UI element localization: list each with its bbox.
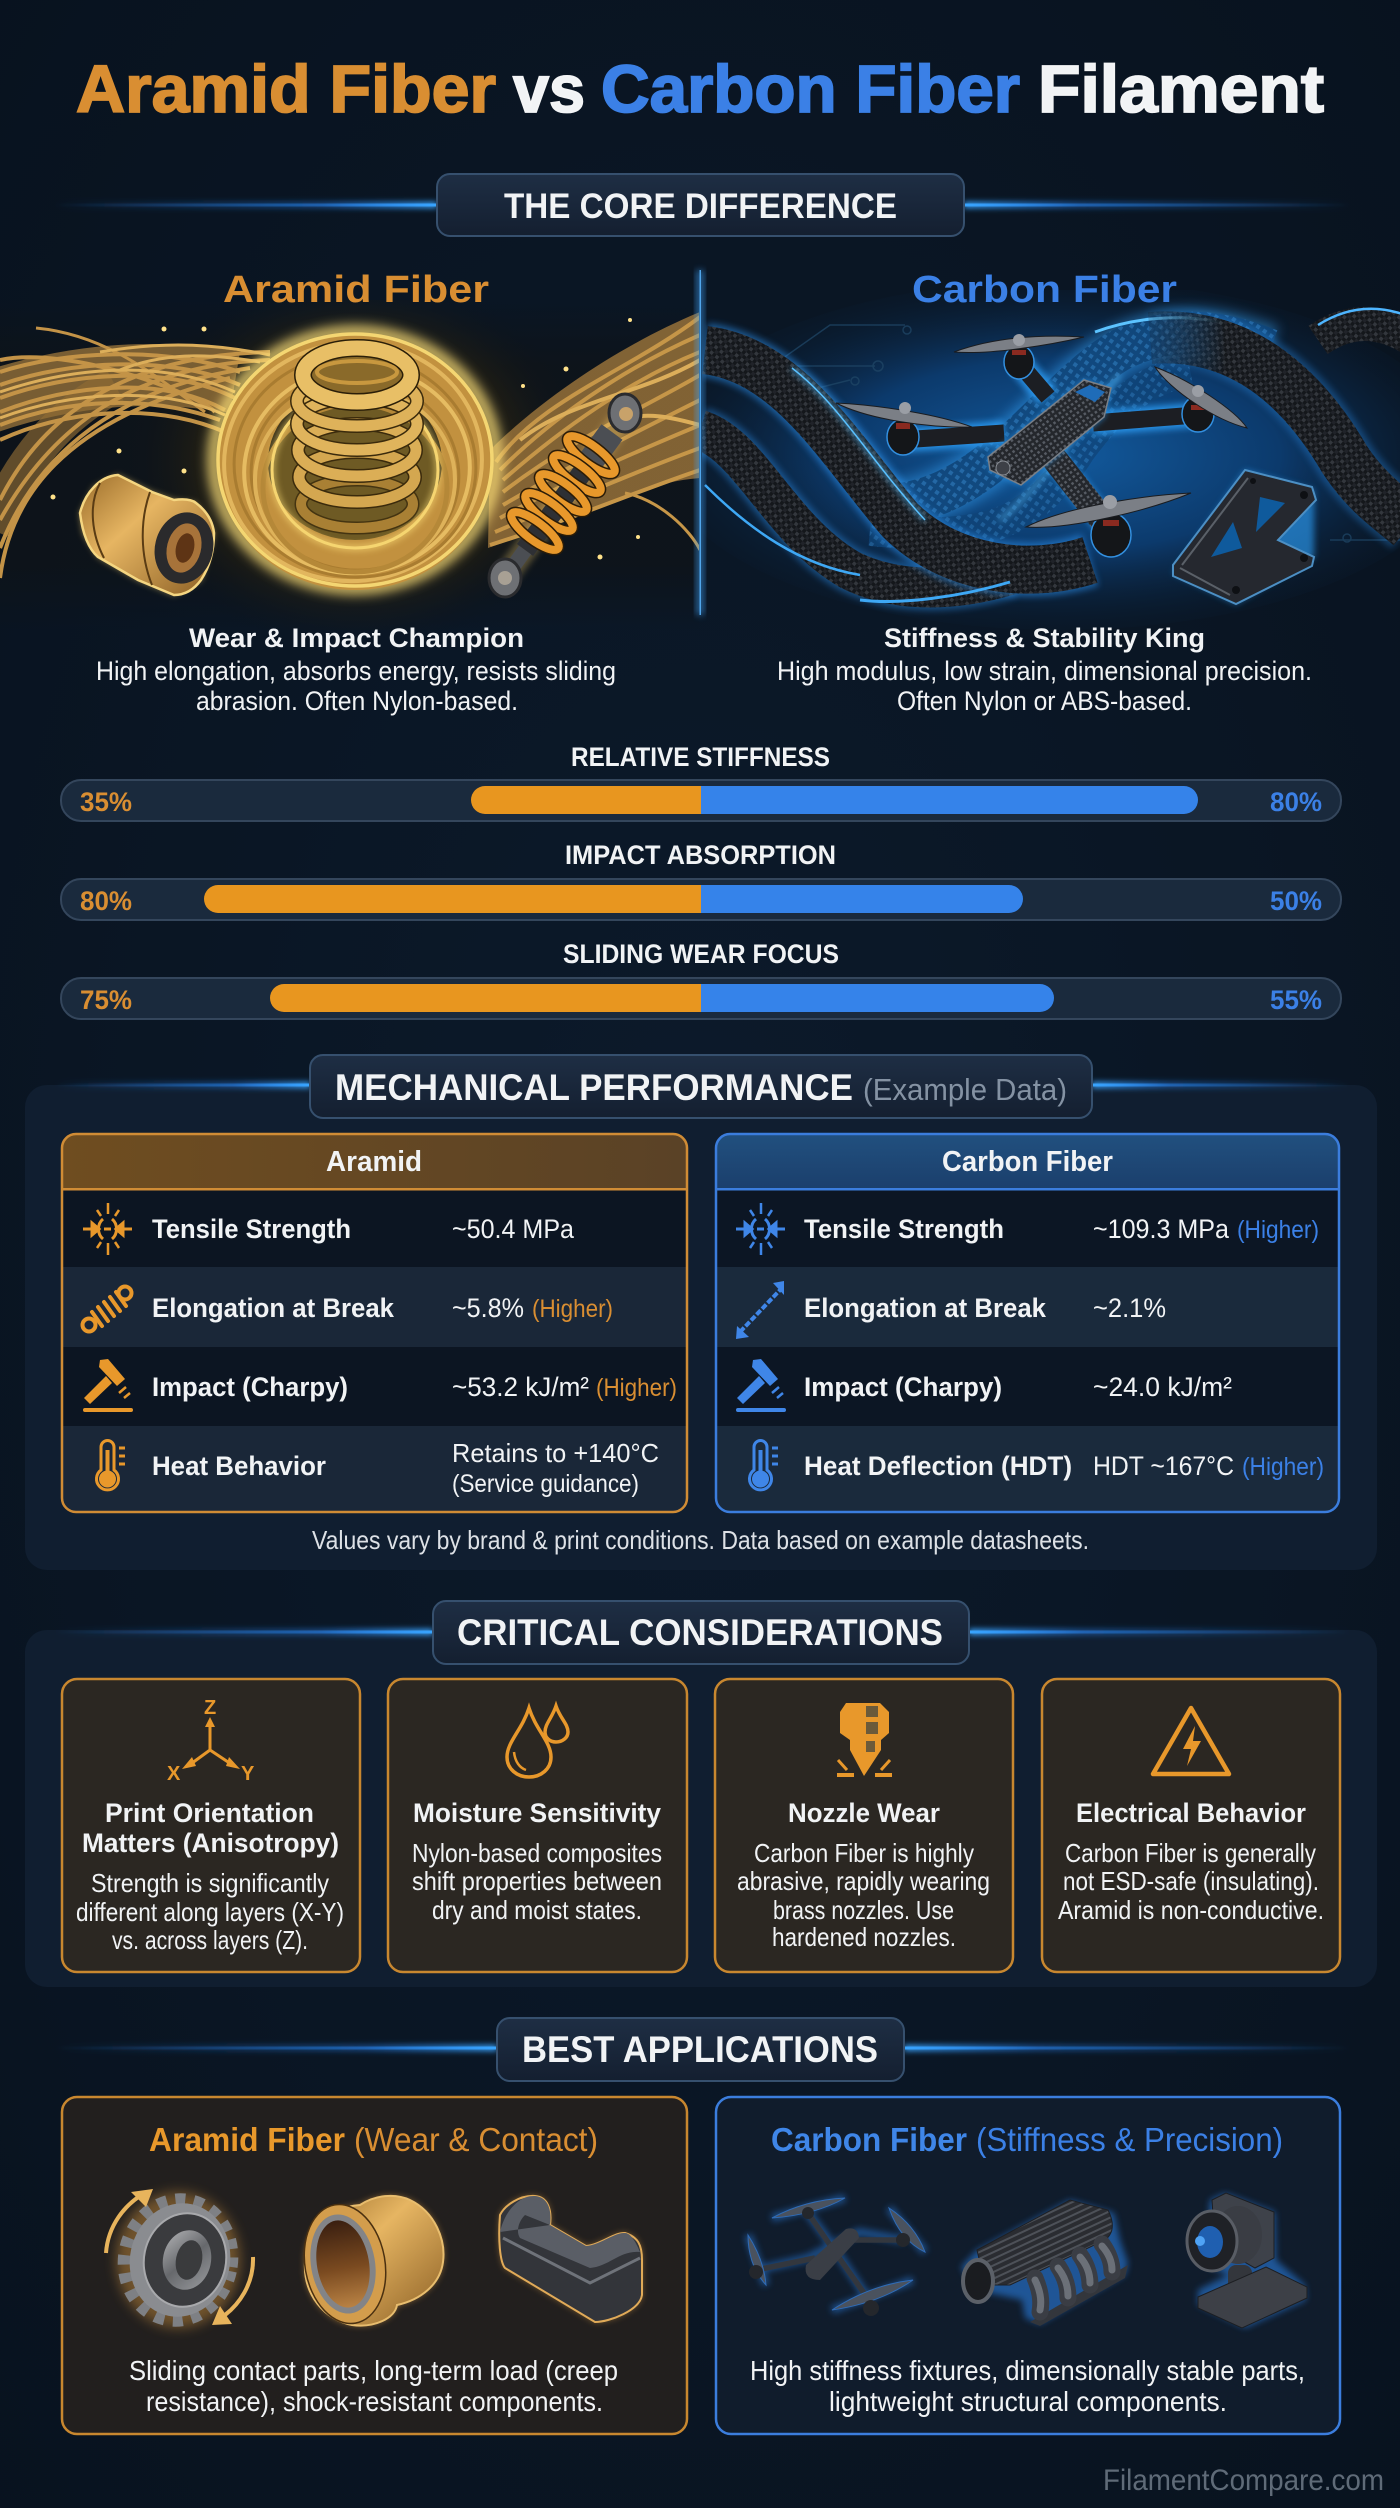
bar: sliding wear focus: 55% bbox=[1270, 985, 1322, 1015]
illustration: aramid fiber bbox=[0, 307, 699, 612]
table: carbon fiber: ~24.0 kJ/m² bbox=[1093, 1372, 1232, 1402]
panel: carbon applications: (Stiffness & Precision) bbox=[976, 2121, 1283, 2158]
section heading: best applications: BEST APPLICATIONS bbox=[522, 2029, 878, 2070]
table: aramid: Tensile Strength bbox=[152, 1214, 351, 1244]
card: nozzle wear: hardened nozzles. bbox=[772, 1922, 956, 1952]
section heading: critical considerations: CRITICAL CONSIDERATIONS bbox=[457, 1612, 943, 1653]
card: nozzle wear: Carbon Fiber is highly bbox=[754, 1838, 974, 1868]
bar: sliding wear focus bbox=[61, 939, 1341, 1019]
text: aramid summary: abrasion. Often Nylon-based. bbox=[196, 686, 518, 716]
bar: impact absorption: 50% bbox=[1270, 886, 1322, 916]
icon: elongation arrow bbox=[736, 1281, 784, 1339]
panel: carbon applications: lightweight structural components. bbox=[829, 2386, 1227, 2417]
bar: relative stiffness bbox=[61, 742, 1341, 821]
section heading: mechanical performance: MECHANICAL PERFORMANCE bbox=[335, 1067, 853, 1108]
sparks bbox=[50, 318, 640, 560]
card: electrical behavior bbox=[1042, 1679, 1340, 1972]
circuit traces bbox=[745, 325, 1400, 542]
coil bbox=[212, 330, 496, 594]
table: carbon fiber: (Higher) bbox=[1237, 1216, 1319, 1244]
table: carbon fiber: Elongation at Break bbox=[804, 1293, 1047, 1323]
bar: relative stiffness: 35% bbox=[80, 787, 132, 817]
icon: xyz axes: Z bbox=[204, 1697, 216, 1719]
icon: tensile bbox=[736, 1203, 785, 1255]
table: aramid: (Higher) bbox=[532, 1295, 613, 1323]
icon: water drops bbox=[507, 1706, 568, 1777]
text: aramid summary bbox=[96, 623, 616, 716]
panel: aramid applications bbox=[62, 2097, 687, 2434]
bracket bbox=[1173, 470, 1316, 604]
card: electrical behavior: not ESD-safe (insulating). bbox=[1063, 1866, 1319, 1896]
table: aramid: (Higher) bbox=[596, 1374, 677, 1402]
card: print orientation: Matters (Anisotropy) bbox=[82, 1828, 339, 1858]
icon: tensile bbox=[83, 1203, 132, 1255]
text: carbon summary: Stiffness & Stability King bbox=[884, 623, 1205, 653]
translucent blue rope bbox=[870, 318, 1270, 533]
section heading: the core difference bbox=[55, 174, 1350, 236]
icon: bushing bbox=[295, 2196, 443, 2330]
title bbox=[76, 52, 1324, 127]
panel: aramid applications: Aramid Fiber bbox=[149, 2121, 345, 2158]
bar: impact absorption: 80% bbox=[80, 886, 132, 916]
heading: aramid fiber: Aramid Fiber bbox=[223, 269, 489, 311]
card: nozzle wear: brass nozzles. Use bbox=[773, 1895, 954, 1925]
table: aramid: (Service guidance) bbox=[452, 1470, 639, 1498]
table: carbon fiber: ~2.1% bbox=[1093, 1293, 1166, 1323]
icon: xyz axes: Y bbox=[241, 1763, 255, 1785]
text: aramid summary: Wear & Impact Champion bbox=[189, 623, 524, 653]
bar: sliding wear focus: SLIDING WEAR FOCUS bbox=[563, 939, 839, 969]
text: carbon summary: High modulus, low strain, dimensional precision. bbox=[777, 656, 1312, 686]
section heading: the core difference: THE CORE DIFFERENCE bbox=[504, 187, 897, 226]
card: nozzle wear: Nozzle Wear bbox=[788, 1798, 940, 1828]
card: print orientation bbox=[62, 1679, 360, 1972]
icon: impact hammer bbox=[736, 1359, 786, 1412]
text: carbon summary bbox=[777, 623, 1312, 716]
table: aramid: Heat Behavior bbox=[152, 1451, 326, 1481]
bar: impact absorption: IMPACT ABSORPTION bbox=[565, 840, 836, 870]
icon: clip bbox=[499, 2196, 642, 2322]
table: carbon fiber: Impact (Charpy) bbox=[804, 1372, 1002, 1402]
table: carbon fiber: ~109.3 MPa bbox=[1093, 1214, 1230, 1244]
panel: carbon applications bbox=[716, 2097, 1340, 2434]
illustration: carbon fiber bbox=[702, 292, 1400, 616]
centre divider bbox=[696, 270, 704, 615]
title: Filament bbox=[1038, 52, 1324, 127]
table: carbon fiber: Heat Deflection (HDT) bbox=[804, 1451, 1072, 1481]
icon: gear bbox=[106, 2189, 253, 2328]
table: carbon fiber: (Higher) bbox=[1242, 1453, 1324, 1481]
icon: electrical warning bbox=[1153, 1708, 1229, 1774]
fiber fan right bbox=[488, 312, 700, 548]
card: moisture sensitivity: dry and moist states. bbox=[432, 1895, 642, 1925]
panel: aramid applications: (Wear & Contact) bbox=[354, 2121, 598, 2158]
card: moisture sensitivity: Nylon-based composites bbox=[412, 1838, 662, 1868]
text: carbon summary: Often Nylon or ABS-based. bbox=[897, 686, 1192, 716]
table: aramid: Elongation at Break bbox=[152, 1293, 395, 1323]
card: moisture sensitivity bbox=[388, 1679, 687, 1972]
bar: impact absorption bbox=[61, 840, 1341, 920]
heading: carbon fiber: Carbon Fiber bbox=[912, 269, 1177, 311]
bar: sliding wear focus: 75% bbox=[80, 985, 132, 1015]
carbon ropes bbox=[700, 309, 1400, 601]
card: electrical behavior: Aramid is non-conductive. bbox=[1058, 1895, 1324, 1925]
bar: relative stiffness: RELATIVE STIFFNESS bbox=[571, 742, 830, 772]
card: print orientation: Strength is significantly bbox=[91, 1868, 329, 1898]
icon: impact hammer bbox=[83, 1359, 133, 1412]
card: print orientation: vs. across layers (Z). bbox=[112, 1925, 308, 1955]
icon: thermometer bbox=[97, 1440, 125, 1490]
icon: small drone bbox=[748, 2198, 925, 2316]
table: aramid bbox=[62, 1134, 687, 1512]
table: aramid: ~50.4 MPa bbox=[452, 1214, 575, 1244]
fiber bands left bbox=[0, 328, 270, 578]
spring bbox=[297, 348, 417, 528]
panel: aramid applications: Sliding contact parts, long-term load (creep bbox=[129, 2355, 618, 2386]
text: aramid summary: High elongation, absorbs energy, resists sliding bbox=[96, 656, 616, 686]
card: moisture sensitivity: Moisture Sensitivity bbox=[413, 1798, 661, 1828]
icon: nozzle bbox=[837, 1703, 892, 1777]
bar: relative stiffness: 80% bbox=[1270, 787, 1322, 817]
table: carbon fiber: HDT ~167°C bbox=[1093, 1451, 1234, 1481]
table: carbon fiber bbox=[716, 1134, 1339, 1512]
panel: carbon applications: Carbon Fiber bbox=[771, 2121, 967, 2158]
shock absorber bbox=[489, 394, 641, 597]
panel: carbon applications: High stiffness fixtures, dimensionally stable parts, bbox=[750, 2355, 1305, 2386]
table: aramid: Impact (Charpy) bbox=[152, 1372, 348, 1402]
card: print orientation: Print Orientation bbox=[105, 1798, 314, 1828]
table: aramid: ~5.8% bbox=[452, 1293, 524, 1323]
card: nozzle wear: abrasive, rapidly wearing bbox=[737, 1866, 990, 1896]
card: nozzle wear bbox=[715, 1679, 1013, 1972]
table: aramid: ~53.2 kJ/m² bbox=[452, 1372, 589, 1402]
section heading: mechanical performance bbox=[55, 1055, 1350, 1118]
watermark: FilamentCompare.com bbox=[1103, 2464, 1384, 2497]
title: vs bbox=[513, 52, 585, 127]
section heading: critical considerations bbox=[55, 1601, 1350, 1664]
panel: mechanical performance bbox=[25, 1055, 1377, 1570]
title: Aramid Fiber bbox=[76, 52, 496, 127]
icon: xyz axes: X bbox=[167, 1763, 181, 1785]
icon: thermometer bbox=[750, 1440, 778, 1490]
footnote: Values vary by brand & print conditions. Data based on example datasheets. bbox=[312, 1525, 1089, 1555]
card: electrical behavior: Carbon Fiber is generally bbox=[1065, 1838, 1316, 1868]
card: moisture sensitivity: shift properties between bbox=[412, 1866, 662, 1896]
panel: critical considerations bbox=[25, 1601, 1377, 1987]
table: aramid: Aramid bbox=[326, 1146, 422, 1178]
table: aramid: Retains to +140°C bbox=[452, 1438, 659, 1468]
bushing bbox=[80, 475, 221, 595]
section heading: best applications bbox=[55, 2018, 1350, 2081]
table: carbon fiber: Tensile Strength bbox=[804, 1214, 1004, 1244]
icon: spring bbox=[82, 1286, 132, 1332]
table: carbon fiber: Carbon Fiber bbox=[942, 1146, 1113, 1178]
card: electrical behavior: Electrical Behavior bbox=[1076, 1798, 1306, 1828]
title: Carbon Fiber bbox=[601, 52, 1020, 127]
icon: manifold bbox=[961, 2200, 1128, 2326]
card: print orientation: different along layers (X-Y) bbox=[76, 1897, 344, 1927]
panel: aramid applications: resistance), shock-resistant components. bbox=[146, 2386, 603, 2417]
section heading: mechanical performance: (Example Data) bbox=[863, 1072, 1067, 1107]
drone bbox=[836, 334, 1247, 557]
icon: camera bbox=[1187, 2193, 1307, 2328]
icon: xyz axes bbox=[167, 1697, 255, 1785]
